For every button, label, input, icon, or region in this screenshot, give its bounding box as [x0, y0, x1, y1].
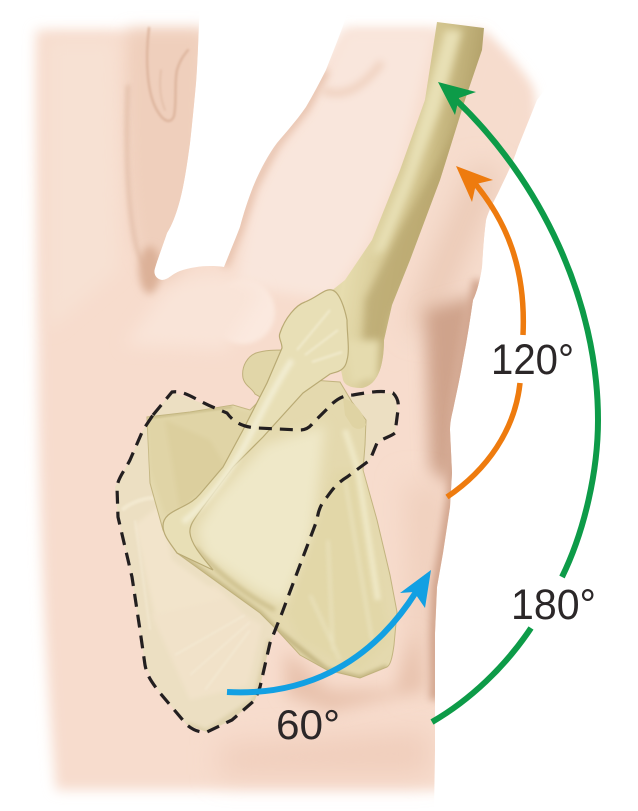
back of arm shadow	[420, 170, 487, 330]
blue arc	[227, 592, 416, 692]
spine highlight	[183, 360, 292, 522]
orange arrowhead	[456, 166, 493, 202]
label: 60 degrees: 60°	[276, 701, 340, 748]
upper arm bone	[320, 22, 484, 388]
green arc upper	[456, 100, 598, 577]
green arc lower	[432, 628, 531, 722]
upper arm lit	[235, 30, 437, 300]
neck fold	[147, 28, 188, 121]
humerus shaft	[320, 22, 484, 388]
arrow: 60 degrees blue	[227, 570, 431, 692]
back of arm	[480, 32, 514, 277]
supraspinous fossa	[148, 406, 250, 509]
humeral head and scapular spine	[163, 290, 348, 570]
neck highlight	[48, 40, 118, 330]
head tendon lines	[297, 310, 342, 362]
pale scapula body	[115, 392, 398, 732]
lit shoulder pad	[232, 290, 275, 344]
arm crease	[322, 62, 382, 93]
neck shading	[126, 30, 205, 285]
upper shoulder lit	[142, 280, 224, 344]
orange arc upper	[472, 180, 523, 335]
arrow: 120 degrees orange	[447, 166, 523, 497]
skin base	[36, 30, 560, 790]
green arrowhead	[438, 82, 476, 115]
pale scapula inner rays	[122, 498, 270, 732]
head and spine shape	[163, 290, 348, 570]
pale dashed scapula (rest position)	[115, 392, 398, 732]
arrow: 180 degrees green	[432, 82, 598, 722]
label: 180 degrees: 180°	[511, 581, 596, 629]
lower torso shadow	[220, 730, 430, 775]
scapula body	[147, 378, 397, 678]
acromion edge	[343, 398, 366, 429]
right edge shadow	[435, 280, 478, 700]
medial band shading	[177, 553, 387, 678]
scapula cast shadow	[280, 644, 424, 716]
torso and arm skin	[36, 28, 560, 790]
scapula rest position dashed outline	[117, 392, 398, 732]
lateral border highlight	[345, 430, 378, 600]
main scapula (elevated position)	[147, 378, 397, 678]
label: 120 degrees: 120°	[491, 336, 574, 384]
arm left edge shadow	[224, 70, 326, 267]
humerus highlights	[345, 30, 472, 385]
orange arc lower	[447, 383, 520, 497]
coracoid process	[243, 350, 286, 398]
blue arrowhead	[400, 570, 431, 608]
axilla right shadow	[425, 295, 476, 490]
lower arm side light	[408, 489, 442, 646]
neck long crease	[124, 85, 141, 260]
armpit shadow	[139, 246, 161, 294]
lateral border ribs	[298, 525, 321, 586]
infraspinous fossa light	[197, 425, 325, 605]
